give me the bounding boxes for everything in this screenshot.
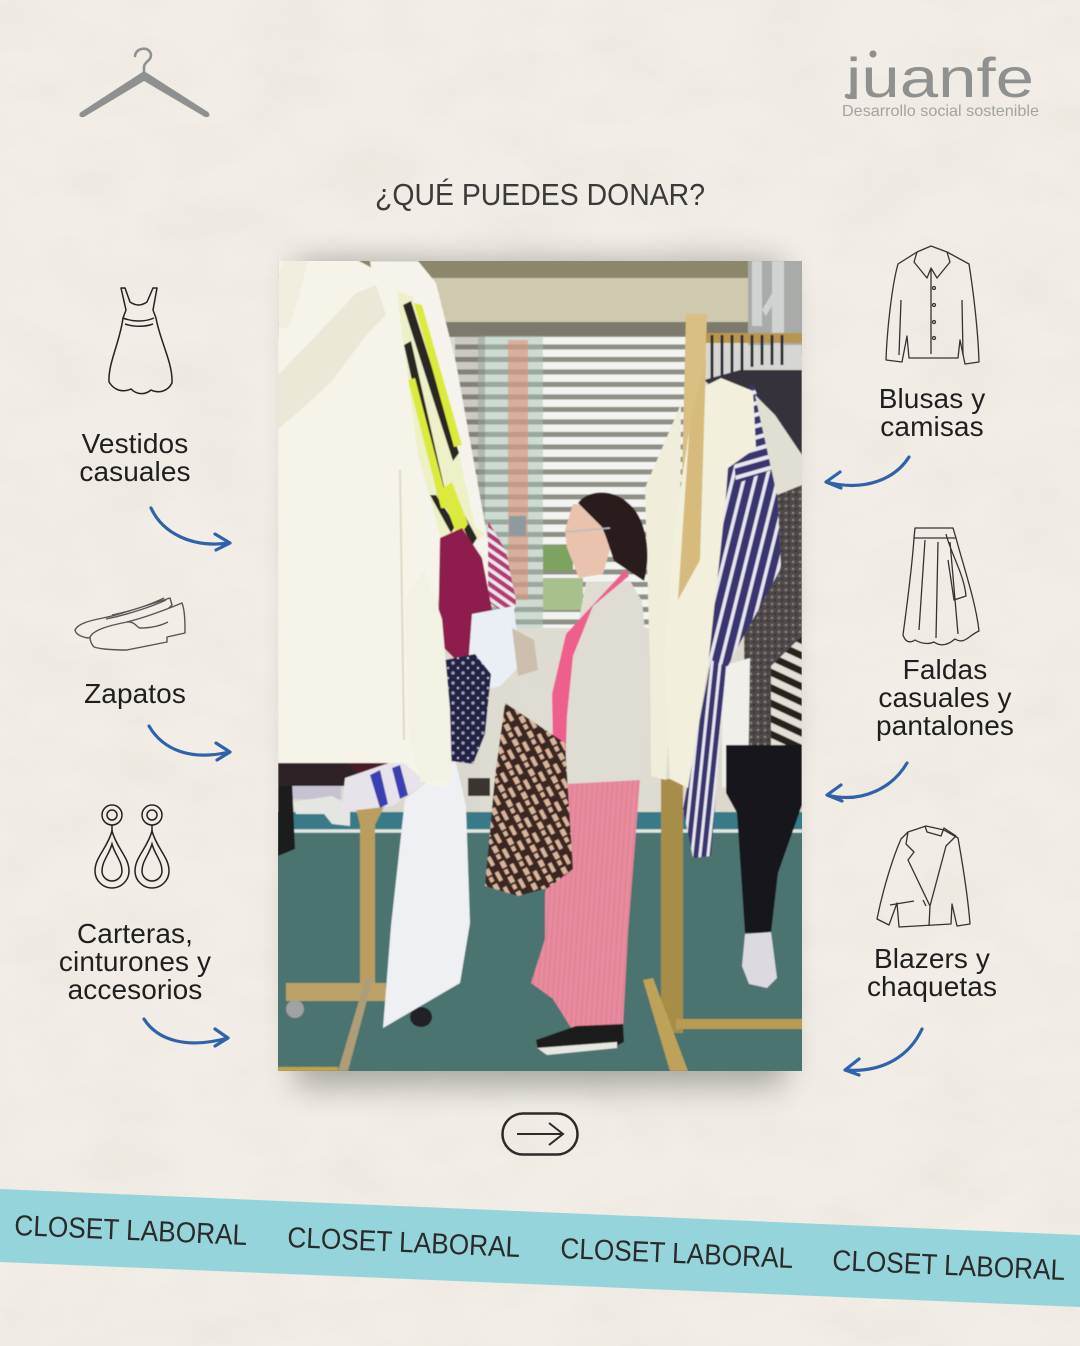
label: vestidos casuales <box>79 428 191 487</box>
photo: woman sorting clothes on racks <box>278 261 802 1071</box>
label: carteras, cinturones y accesorios <box>59 918 211 1005</box>
label: faldas casuales y pantalones: casuales y <box>878 682 1012 713</box>
label: blusas y camisas <box>879 383 986 442</box>
banner: closet laboral <box>0 1189 1080 1307</box>
label: blazers y chaquetas <box>867 943 997 1002</box>
icon: blazer <box>876 825 971 928</box>
label: faldas casuales y pantalones <box>876 654 1014 741</box>
arrow: carteras <box>142 1017 230 1048</box>
arrow: blusas <box>824 455 911 490</box>
icon: dress <box>108 287 173 394</box>
logo: juanfe <box>842 50 1039 120</box>
arrow: zapatos <box>147 724 232 762</box>
label: blazers y chaquetas: Blazers y <box>874 943 990 974</box>
logo: juanfe: Desarrollo social sostenible <box>842 103 1039 120</box>
arrow: faldas <box>825 761 909 803</box>
label: carteras, cinturones y accesorios: accesorios <box>68 974 202 1005</box>
label: faldas casuales y pantalones: pantalones <box>876 710 1014 741</box>
label: faldas casuales y pantalones: Faldas <box>903 654 987 685</box>
label: carteras, cinturones y accesorios: Carteras, <box>77 918 193 949</box>
icon: hanger <box>79 47 210 118</box>
icon: shoes <box>74 597 186 651</box>
label: zapatos: Zapatos <box>84 678 186 709</box>
label: vestidos casuales: Vestidos <box>82 428 188 459</box>
label: blazers y chaquetas: chaquetas <box>867 971 997 1002</box>
banner: closet laboral: CLOSET LABORAL <box>560 1233 794 1275</box>
logo: juanfe: juanfe <box>844 46 1034 109</box>
label: vestidos casuales: casuales <box>79 456 191 487</box>
icon: blouse <box>885 245 980 365</box>
arrow: vestidos <box>149 506 232 552</box>
icon: skirt <box>902 527 980 646</box>
label: blusas y camisas: camisas <box>880 411 984 442</box>
arrow: blazers <box>843 1027 924 1077</box>
label: carteras, cinturones y accesorios: cinturones y <box>59 946 211 977</box>
button: arrow pill <box>501 1112 579 1156</box>
banner: closet laboral: CLOSET LABORAL <box>14 1210 248 1252</box>
banner: closet laboral: CLOSET LABORAL <box>287 1222 521 1264</box>
label: blusas y camisas: Blusas y <box>879 383 985 414</box>
icon: earrings <box>94 804 170 889</box>
